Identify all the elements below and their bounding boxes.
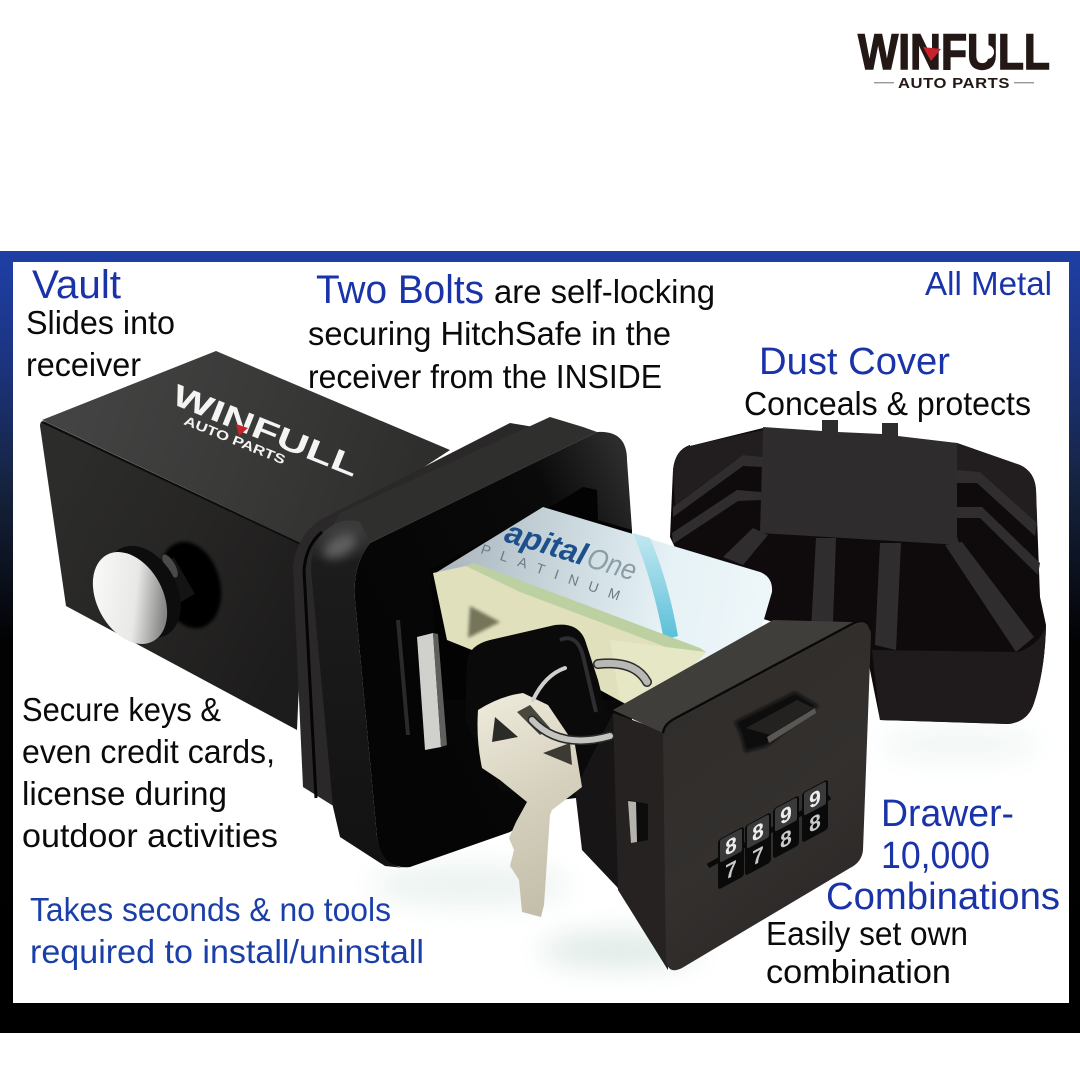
- wheel 1: 8: [725, 831, 737, 861]
- key head and blade: [478, 693, 582, 917]
- white panel: [13, 262, 1069, 1003]
- drawer side: [613, 713, 668, 970]
- wheel 4: 9: [809, 784, 821, 814]
- wheel 1: [718, 826, 744, 890]
- card brand text: apital: [501, 514, 593, 573]
- drawer body: [575, 713, 668, 970]
- drawer top: [613, 620, 868, 734]
- dust cover top plate: [760, 420, 960, 545]
- wheel 4: [802, 779, 828, 843]
- label: secure keys: outdoor activities: [22, 817, 278, 854]
- label: secure keys: even credit cards,: [22, 733, 275, 770]
- gasket: [293, 423, 540, 807]
- vault body: [40, 351, 450, 730]
- label: drawer: [766, 793, 1060, 990]
- flange top strip: [330, 417, 597, 543]
- label: dust cover: [744, 341, 1031, 422]
- label: secure keys: Secure keys &: [22, 691, 221, 728]
- knob: [78, 533, 230, 657]
- key holes: [492, 717, 518, 742]
- vault left face: [40, 421, 305, 730]
- dust cover ribs: [672, 455, 1040, 652]
- watermark logo: WINFULL: [167, 379, 363, 484]
- label: vault: [26, 263, 175, 383]
- floor shadows: [370, 731, 1040, 968]
- dust cover front wall: [872, 625, 1046, 724]
- brand logo: AUTO PARTS: [898, 75, 1010, 92]
- label: two bolts: [308, 268, 715, 395]
- label: vault: Slides into: [26, 304, 175, 341]
- latch bolt: [396, 620, 447, 750]
- drawer: [575, 620, 871, 970]
- brand logo: WINFULL: [858, 24, 1050, 80]
- flange and gasket: [293, 417, 632, 868]
- opening: [430, 487, 632, 700]
- wheel 2: 7: [752, 841, 764, 871]
- watermark logo: AUTO PARTS: [182, 413, 288, 467]
- front plate: [355, 432, 632, 867]
- watermark logo: [167, 379, 363, 484]
- wheel 3: 8: [780, 824, 792, 854]
- label: drawer: Drawer-: [881, 793, 1014, 835]
- dust cover upper corners: [673, 430, 1037, 523]
- label: vault: Vault: [32, 263, 121, 307]
- key fob: [465, 625, 612, 800]
- drawer face: [663, 623, 871, 970]
- flange side: [311, 520, 405, 868]
- wheel 2: 8: [752, 817, 764, 847]
- drawer side clip: [628, 800, 648, 843]
- label: all metal: All Metal: [925, 265, 1052, 302]
- label: drawer: combination: [766, 953, 951, 990]
- combination wheels: [708, 779, 830, 890]
- credit card: [437, 507, 772, 680]
- wheel 4: 8: [809, 808, 821, 838]
- drawer handle: [735, 692, 818, 752]
- label: secure keys: license during: [22, 775, 227, 812]
- label: secure keys: [22, 691, 278, 854]
- label: dust cover: Dust Cover: [759, 341, 950, 383]
- label: installation: Takes seconds & no tools: [30, 891, 391, 928]
- folded cash: [433, 563, 706, 712]
- wheel 3: [773, 795, 799, 859]
- dust cover body: [670, 428, 1046, 724]
- label: vault: receiver: [26, 346, 141, 383]
- label: dust cover: Conceals & protects: [744, 385, 1031, 422]
- dust cover: [670, 420, 1046, 724]
- label: drawer: Easily set own: [766, 915, 968, 952]
- card brand text: [501, 514, 641, 587]
- key: [478, 663, 647, 917]
- label: installation: [30, 891, 424, 970]
- label: drawer: Combinations: [826, 876, 1060, 918]
- gradient frame: [0, 251, 1080, 1033]
- label: two bolts: Two Bolts: [316, 268, 484, 312]
- wheel 2: [745, 812, 771, 876]
- label: two bolts: are self-locking: [494, 273, 715, 310]
- card platinum text: PLATINUM: [479, 541, 622, 603]
- wheel 1: 7: [725, 855, 737, 885]
- label: drawer: 10,000: [881, 835, 990, 877]
- key rings: [532, 663, 647, 740]
- vault top face: [42, 351, 450, 545]
- card brand text: One: [583, 542, 640, 587]
- label: two bolts: receiver from the INSIDE: [308, 358, 662, 395]
- wheel 3: 9: [780, 800, 792, 830]
- label: installation: required to install/uninstall: [30, 933, 424, 970]
- card swoosh: [633, 533, 678, 640]
- label: two bolts: securing HitchSafe in the: [308, 315, 671, 352]
